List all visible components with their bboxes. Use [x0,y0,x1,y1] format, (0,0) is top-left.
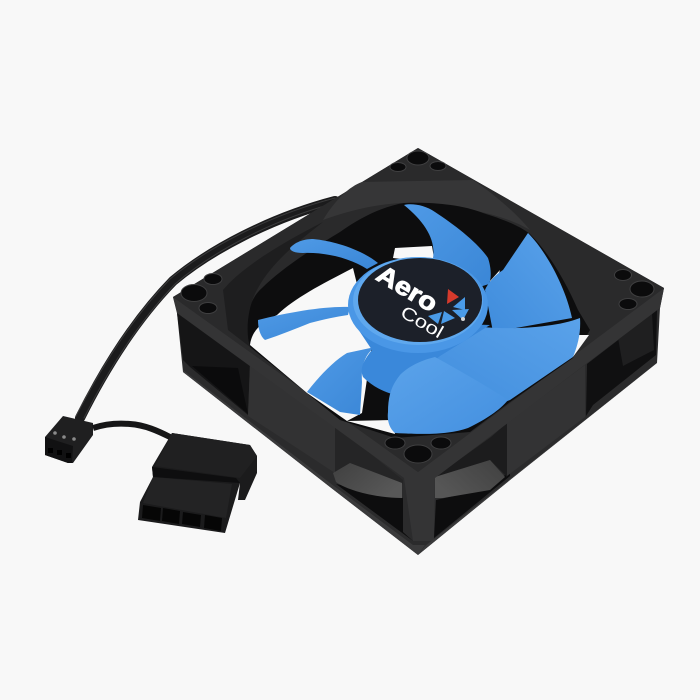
blade: left [258,307,350,340]
see-through openings [250,246,589,434]
small 3-pin connector [45,416,93,463]
frame silhouette [173,148,664,555]
fan frame [173,148,664,555]
side face: lower right [418,310,657,555]
blade: upper left [290,239,378,269]
logo text: Aero: Aero [372,260,442,318]
logo text: Cool: Cool [397,302,447,342]
top face [173,148,664,472]
mounting holes [181,151,654,463]
power cable [76,198,335,418]
frame rim lip [173,288,664,478]
blade: lower left [307,347,375,415]
hub rim [348,257,488,353]
frame recess [247,203,590,438]
blade: right [420,318,580,412]
side face: lower left [177,313,435,555]
hub base [352,320,490,394]
blade: upper right [485,233,572,332]
recess shading [223,222,323,347]
fan blades [258,204,580,415]
hub [348,257,490,394]
hub top edge [353,257,483,345]
textured corner band [323,180,530,230]
blade: bottom [388,357,508,434]
hub label disc [358,258,482,342]
blade: top [404,204,491,290]
Molex connector [138,433,257,533]
logo emblem [428,289,469,324]
connector cable [93,424,170,437]
